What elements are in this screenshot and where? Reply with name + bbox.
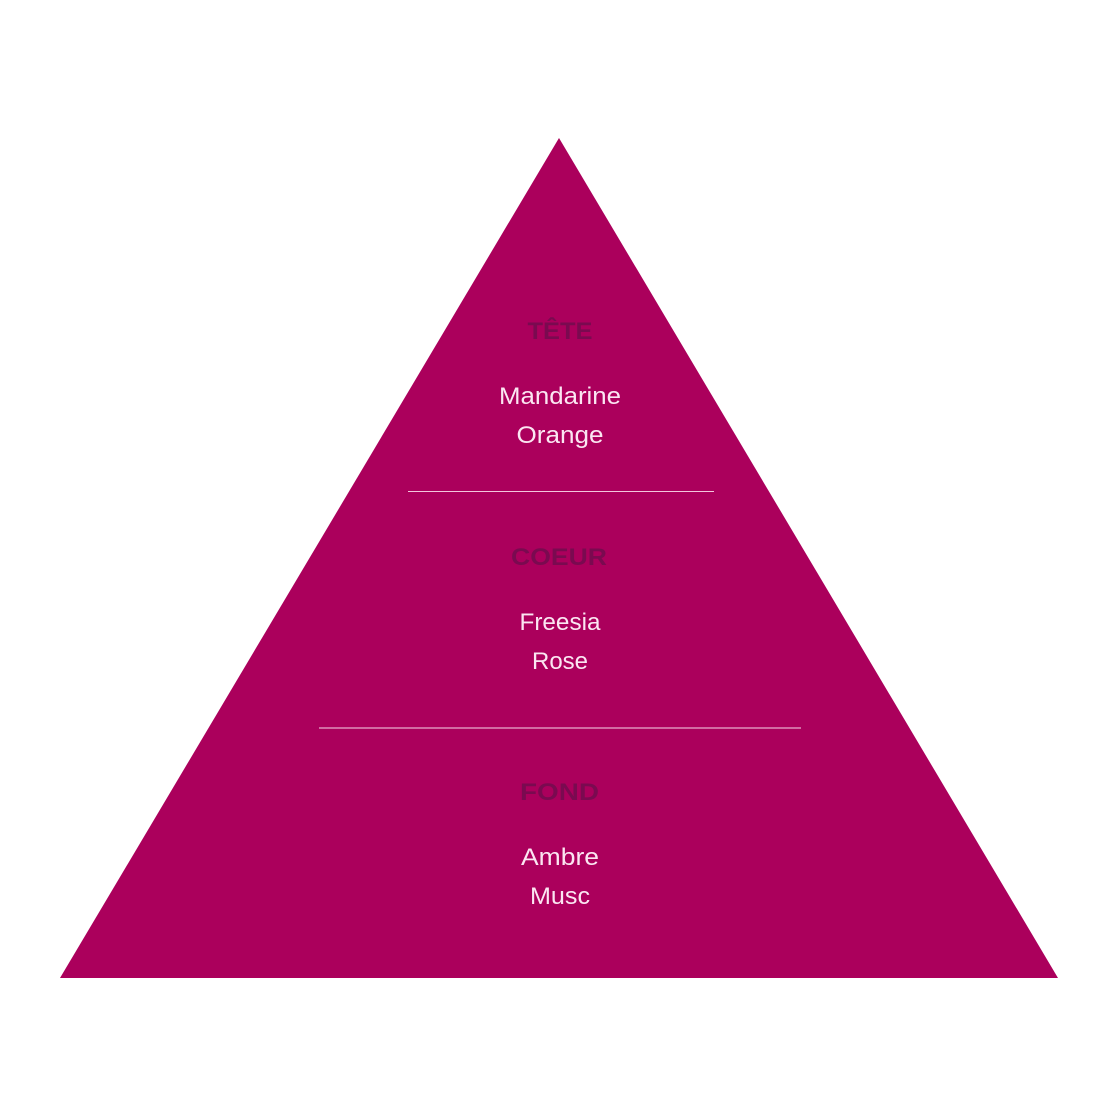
heading: coeur: COEUR	[511, 544, 607, 571]
notes: fond: Musc	[530, 883, 590, 910]
section: tête	[499, 317, 621, 449]
section: coeur	[511, 544, 607, 675]
notes: tête: Orange	[516, 422, 604, 449]
notes: tête: Mandarine	[499, 383, 621, 410]
notes: coeur: Freesia	[520, 609, 601, 636]
pyramid	[60, 138, 1058, 978]
notes: fond	[521, 844, 599, 910]
section: fond	[520, 779, 599, 910]
notes: coeur	[520, 609, 601, 675]
heading: fond: FOND	[520, 779, 599, 806]
notes: coeur: Rose	[532, 648, 588, 675]
heading: tête: TÊTE	[528, 317, 592, 345]
notes: tête	[499, 383, 621, 449]
notes: fond: Ambre	[521, 844, 599, 871]
